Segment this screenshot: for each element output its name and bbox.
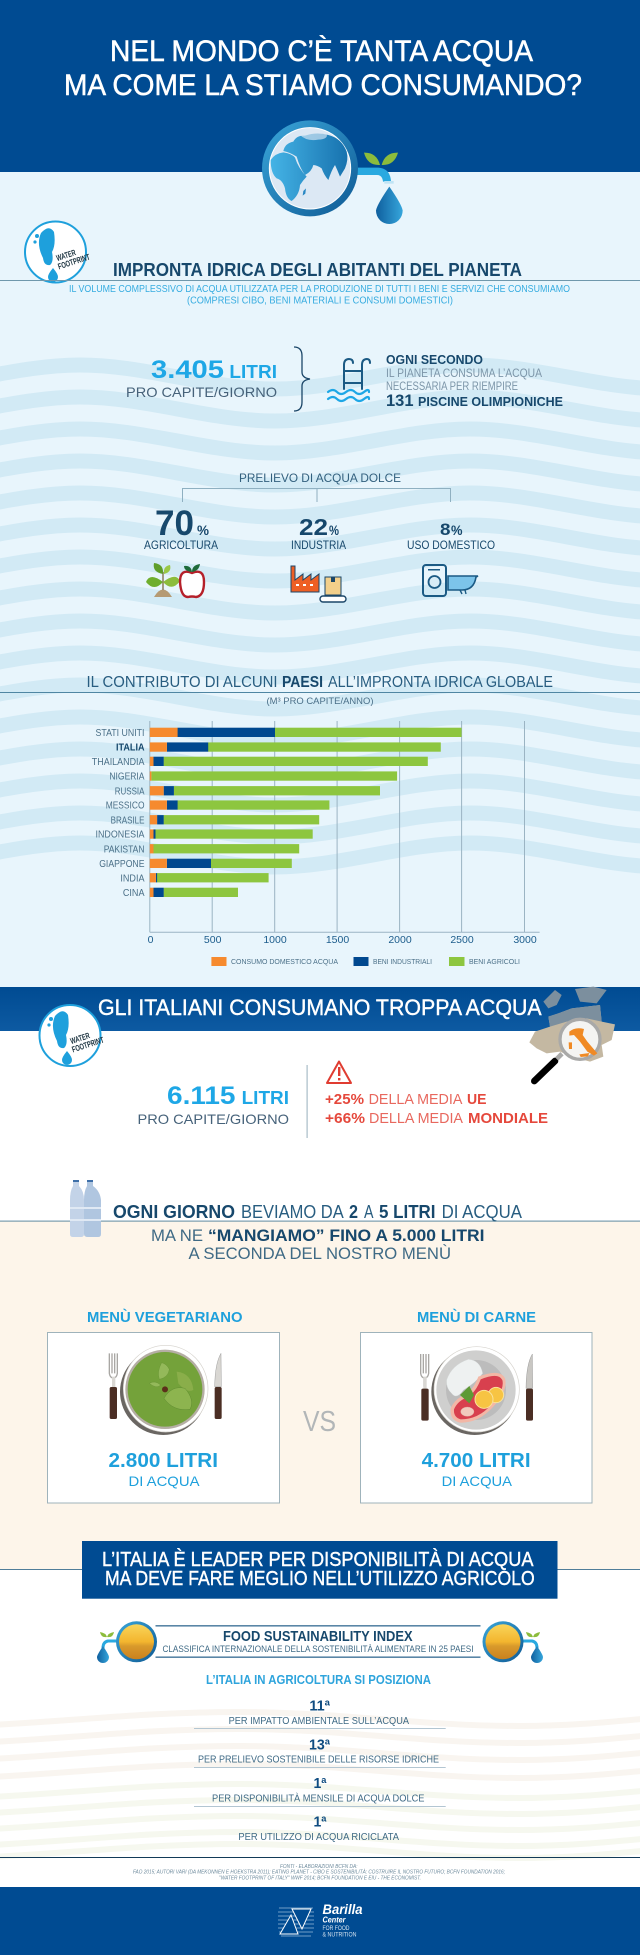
axis labels: 2000 [388,934,412,946]
icon: parched sun globe right [482,1621,543,1663]
text: mangiamo: “MANGIAMO” FINO A 5.000 LITRI [208,1226,484,1245]
barilla center logo: FOR FOOD [322,1926,350,1932]
country labels: INDIA [120,873,145,884]
heading: contributo paesi: PAESI [282,674,323,691]
banner: gli italiani [0,987,640,1031]
stat: 3.405 litri: PRO CAPITE/GIORNO [126,384,277,400]
sources: FAO 2015; AUTORI VARI (DA MEKONNEN E HOEKSTRA 2011); EATING PLANET - CIBO E SOSTENIBILITÀ: COSTRUIRE IL NOSTRO FUTURO; BCFN FOUNDATION 2016; [133,1869,505,1876]
icon: washing machine and bathtub [423,565,478,596]
barilla center logo: Center [322,1916,346,1925]
stat: industria 22%: 22 [299,514,328,540]
icon: meat plate [421,1347,533,1435]
title: MA COME LA STIAMO CONSUMANDO? [64,69,582,102]
stat: 3.405 litri: 3.405 [151,356,224,384]
country labels: PAKISTAN [104,844,144,855]
text: ogni secondo [386,352,563,410]
country labels: ITALIA [116,743,144,754]
comparison stats [325,1091,548,1127]
icon: water footprint badge: WATER [55,247,77,263]
chart unit label: (M³ PRO CAPITE/ANNO) [266,696,374,706]
ranking list: PER PRELIEVO SOSTENIBILE DELLE RISORSE IDRICHE [198,1755,439,1766]
heading: contributo paesi: IL CONTRIBUTO DI ALCUNI [86,674,278,691]
ranking list: 1ª [314,1815,327,1831]
panel: menu di carne [360,1332,592,1503]
icon: water footprint badge 2: FOOTPRINT [71,1034,106,1054]
text: mangiamo: A SECONDA DEL NOSTRO MENÙ [188,1244,451,1263]
icon: vegetarian plate [109,1345,222,1435]
country labels: BRASILE [111,815,145,826]
sources: FONTI - ELABORAZIONI BCFN DA: [280,1864,358,1870]
pale field stripes background [0,1712,640,1858]
text: ogni secondo: OGNI SECONDO [386,352,483,367]
banner: italia leader: L’ITALIA È LEADER PER DISPONIBILITÀ DI ACQUA [102,1548,534,1571]
comparison stats: DELLA MEDIA [369,1110,463,1127]
chart legend [211,957,520,966]
barilla center logo: Barilla [322,1902,363,1917]
ranking list: PER UTILIZZO DI ACQUA RICICLATA [238,1832,399,1843]
stat: uso domestico 8% [407,520,495,552]
country labels: NIGERIA [109,772,145,783]
bar chart [92,721,540,946]
ranking list: 1ª [314,1776,327,1792]
wave pattern background [0,365,640,867]
icon: factory and conveyor [291,566,346,602]
country labels: MESSICO [106,801,145,812]
stat: 3.405 litri: LITRI [229,362,277,382]
stat: agricoltura 70%: 70 [155,504,194,543]
stat: 6.115 litri: LITRI [242,1088,289,1108]
text: 4.700 litri: DI ACQUA [442,1473,513,1489]
footer band [0,1887,640,1955]
heading: impronta idrica: IMPRONTA IDRICA DEGLI ABITANTI DEL PIANETA [113,260,522,280]
chart legend: BENI INDUSTRIALI [373,957,432,966]
vs label: VS [303,1406,336,1438]
ranking list: 11ª [309,1699,331,1715]
heading: food sustainability index [156,1625,480,1658]
country labels: THAILANDIA [92,757,145,768]
cream panel: menu [0,1221,640,1569]
barilla center logo [278,1902,363,1938]
country labels: INDONESIA [96,830,145,841]
icon: water footprint badge 2: WATER [69,1030,91,1046]
chart legend: CONSUMO DOMESTICO ACQUA [231,957,338,966]
stat: uso domestico 8%: 8 [440,520,450,539]
stat: industria 22% [291,514,346,552]
ranking list: 13ª [309,1737,331,1753]
text: ogni giorno: 5 LITRI [379,1202,436,1222]
text: 2.800 litri [108,1450,218,1489]
subheading: italia in agricoltura: L’ITALIA IN AGRICOLTURA SI POSIZIONA [206,1673,431,1687]
country labels: STATI UNITI [96,728,144,739]
text: ogni giorno: DI ACQUA [442,1202,522,1222]
light blue background panel [0,172,640,987]
comparison stats: DELLA MEDIA [369,1091,462,1108]
description text [69,283,570,306]
panel: menu vegetariano [48,1332,280,1503]
stat: 6.115 litri: 6.115 [167,1082,236,1110]
icon: plant and apple [146,563,204,597]
icon: globe with tap and drop [262,120,403,224]
heading: menu vegetariano: MENÙ VEGETARIANO [87,1308,242,1326]
country labels: RUSSIA [115,786,145,797]
country labels: CINA [123,888,145,899]
heading: contributo paesi: ALL’IMPRONTA IDRICA GLOBALE [328,674,553,691]
banner: italia leader [82,1541,558,1599]
stat: industria 22%: INDUSTRIA [291,538,346,552]
axis labels [148,934,537,946]
stat: agricoltura 70% [144,504,218,552]
sources [133,1864,505,1881]
axis labels: 2500 [450,934,474,946]
icon: parched sun globe left [97,1621,157,1663]
text: mangiamo: MA NE [151,1226,203,1245]
axis labels: 1500 [326,934,349,946]
text: ogni giorno: BEVIAMO DA [241,1202,344,1222]
ranking list: PER DISPONIBILITÀ MENSILE DI ACQUA DOLCE [212,1791,425,1804]
text: 4.700 litri [422,1450,531,1489]
text: ogni giorno [113,1202,522,1222]
text: 2.800 litri: 2.800 LITRI [108,1450,218,1472]
text: ogni secondo: IL PIANETA CONSUMA L’ACQUA [386,368,542,380]
banner: gli italiani: GLI ITALIANI CONSUMANO TROPPA ACQUA [98,995,542,1020]
stat: 6.115 litri [138,1082,289,1127]
stat: agricoltura 70%: % [197,522,210,538]
heading: food sustainability index: FOOD SUSTAINABILITY INDEX [223,1628,413,1645]
heading: food sustainability index: CLASSIFICA INTERNAZIONALE DELLA SOSTENIBILITÀ ALIMENTARE IN 25 PAESI [162,1644,474,1655]
axis labels: 3000 [513,934,537,946]
stat: agricoltura 70%: AGRICOLTURA [144,538,218,552]
heading: prelievo di acqua dolce: PRELIEVO DI ACQUA DOLCE [239,471,401,485]
stat: uso domestico 8%: USO DOMESTICO [407,538,495,552]
sources: "WATER FOOTPRINT OF ITALY" WWF 2014; BCFN FOUNDATION E EIU - THE ECONOMIST. [219,1875,421,1881]
white panel: food sustainability [0,1569,640,1887]
barilla center logo: & NUTRITION [322,1932,356,1938]
axis labels: 500 [204,934,222,946]
chart legend: BENI AGRICOLI [469,957,520,966]
heading: contributo paesi [0,674,640,693]
brace [294,347,310,411]
icon: warning triangle [327,1062,351,1083]
comparison stats: +66% [325,1110,365,1127]
icon: europe map with magnifier [529,987,615,1081]
icon: water footprint badge: FOOTPRINT [57,251,92,271]
text: 2.800 litri: DI ACQUA [128,1473,200,1489]
text: 4.700 litri: 4.700 LITRI [422,1450,531,1472]
text: ogni giorno: 2 [349,1202,358,1222]
comparison stats: UE [467,1091,486,1108]
text: ogni secondo: NECESSARIA PER RIEMPIRE [386,381,518,393]
axis labels: 0 [148,934,154,946]
country labels: GIAPPONE [99,859,145,870]
axis labels: 1000 [263,934,287,946]
stat: uso domestico 8%: % [451,522,463,538]
icon: water footprint badge 2 [40,1005,106,1066]
comparison stats: +25% [325,1091,364,1108]
comparison stats: MONDIALE [468,1110,548,1127]
ranking list: PER IMPATTO AMBIENTALE SULL’ACQUA [229,1716,409,1727]
title [64,35,582,102]
ranking list [194,1699,446,1843]
country labels [92,728,145,899]
heading: menu di carne: MENÙ DI CARNE [417,1308,536,1326]
banner: italia leader: MA DEVE FARE MEGLIO NELL’UTILIZZO AGRICOLO [105,1567,535,1590]
header band [0,0,640,172]
text: mangiamo [151,1226,484,1263]
text: ogni secondo: PISCINE OLIMPIONICHE [418,394,563,409]
stat: industria 22%: % [329,522,339,538]
text: ogni giorno: OGNI GIORNO [113,1202,235,1222]
stat: 6.115 litri: PRO CAPITE/GIORNO [138,1111,289,1127]
icon: swimming pool ladder [328,359,370,401]
title: NEL MONDO C’È TANTA ACQUA [110,35,533,68]
stat: 3.405 litri [126,356,277,400]
white panel: italiani [0,1031,640,1221]
text: ogni secondo: 131 [386,392,414,410]
icon: water footprint badge [25,222,92,282]
bracket connector [182,488,450,502]
icon: water bottles [70,1180,101,1237]
description text: (COMPRESI CIBO, BENI MATERIALI E CONSUMI DOMESTICI) [187,294,453,306]
text: ogni giorno: A [364,1202,374,1222]
